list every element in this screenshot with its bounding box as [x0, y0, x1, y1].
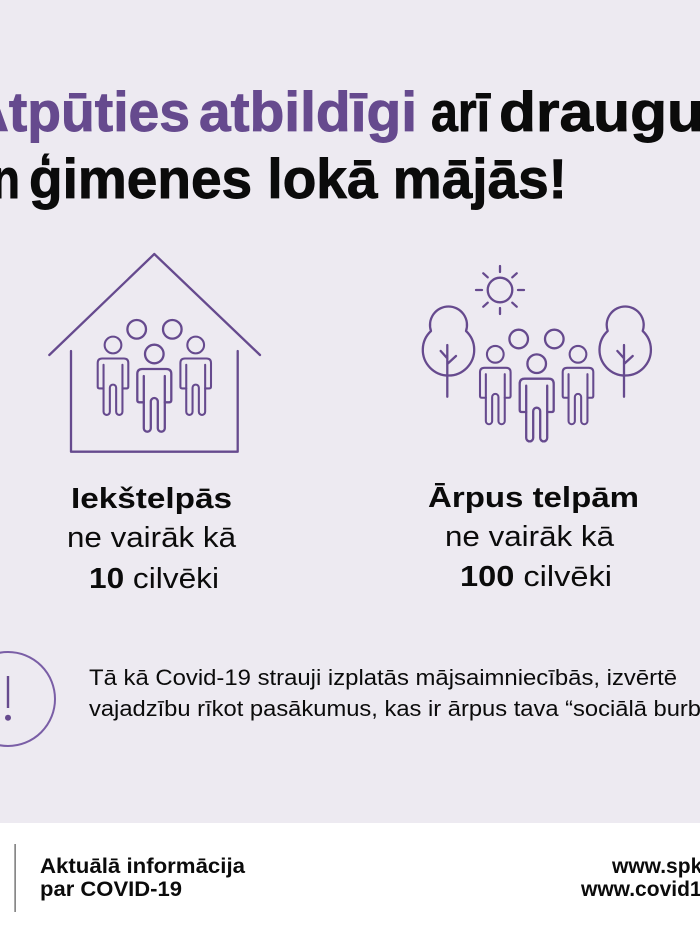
person center [137, 345, 171, 432]
sun [476, 266, 524, 314]
icon: exclamation in circle [0, 652, 55, 746]
title line 1: atbildīgi [199, 80, 417, 143]
icon: people outdoors with trees and sun [423, 266, 651, 441]
title line 2: ģimenes lokā mājās! [29, 147, 567, 210]
person left [98, 337, 128, 415]
person left [480, 346, 511, 424]
icon: house with people [49, 254, 260, 452]
text: indoors limit [67, 483, 237, 595]
footer divider [14, 844, 16, 912]
person right [563, 346, 593, 424]
person right [180, 337, 211, 415]
text: outdoors limit [428, 482, 639, 593]
title line 1 [0, 80, 700, 143]
house walls [71, 351, 238, 452]
footer label: par COVID-19 [40, 878, 182, 901]
indoors heading: Iekštelpās [71, 483, 232, 515]
outdoors heading: Ārpus telpām [428, 482, 639, 514]
callout text: vajadzību rīkot pasākumus, kas ir ārpus tava “sociālā burb [89, 696, 700, 721]
indoors count: 10 cilvēki [89, 563, 219, 595]
indoors line: ne vairāk kā [67, 522, 237, 554]
footer links [580, 855, 700, 901]
footer label [40, 855, 245, 901]
person center [520, 354, 554, 441]
footer label: Aktuālā informācija [40, 855, 245, 878]
tree right [600, 306, 651, 397]
callout text [89, 665, 700, 721]
title line 1: arī [431, 80, 491, 143]
callout text: Tā kā Covid-19 strauji izplatās mājsaimniecībās, izvērtē [89, 665, 677, 690]
tree left [423, 306, 474, 397]
back heads [127, 320, 182, 339]
title line 1: draugu [499, 80, 700, 143]
footer [0, 823, 700, 933]
title [0, 80, 700, 210]
house roof [49, 254, 260, 355]
back heads [509, 330, 564, 348]
outdoors line: ne vairāk kā [445, 521, 615, 553]
outdoors count: 100 cilvēki [460, 561, 612, 593]
footer background [0, 823, 700, 933]
